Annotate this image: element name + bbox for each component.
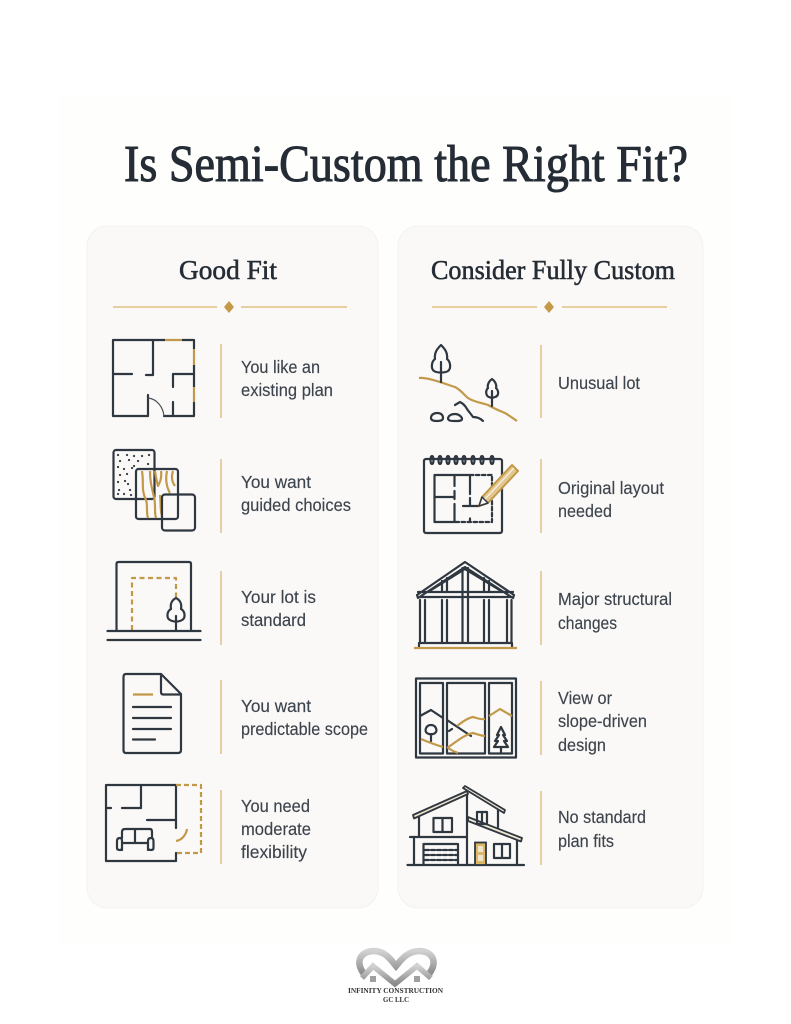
- heading: consider fully custom: Consider Fully Custom: [431, 255, 675, 285]
- text: original layout needed: needed: [558, 501, 612, 521]
- text: unusual lot: Unusual lot: [558, 373, 640, 393]
- text: you like an existing plan: existing plan: [241, 380, 333, 400]
- logo: [348, 951, 444, 1004]
- text: you want guided choices: [241, 472, 351, 515]
- icon: notebook layout: [424, 456, 518, 533]
- text: original layout needed: Original layout: [558, 478, 664, 498]
- text: you want predictable scope: [241, 696, 368, 739]
- icon: view window: [416, 678, 516, 758]
- icon: flexible floor plan: [106, 785, 201, 861]
- text: you need moderate flexibility: moderate: [241, 819, 311, 839]
- divider: [540, 571, 542, 645]
- text: you want guided choices: You want: [241, 472, 311, 492]
- divider: [220, 790, 222, 864]
- text: no standard plan fits: plan fits: [558, 831, 614, 851]
- heading: good fit: Good Fit: [179, 255, 277, 285]
- text: you need moderate flexibility: You need: [241, 796, 310, 816]
- divider: good fit: [113, 301, 347, 313]
- icon: material swatches: [114, 450, 195, 530]
- divider: [220, 680, 222, 754]
- text: your lot is standard: [241, 587, 316, 630]
- divider: [540, 459, 542, 533]
- text: major structural changes: changes: [558, 613, 617, 633]
- icon: sloped lot: [419, 345, 517, 421]
- logo subtext: GC LLC: [383, 995, 409, 1004]
- text: major structural changes: [558, 589, 672, 633]
- text: original layout needed: [558, 478, 664, 521]
- text: no standard plan fits: [558, 807, 646, 851]
- text: major structural changes: Major structural: [558, 589, 672, 609]
- text: view or slope-driven design: slope-driven: [558, 711, 647, 731]
- divider: [540, 791, 542, 865]
- icon: document: [124, 674, 181, 753]
- divider: [220, 459, 222, 533]
- divider: [540, 681, 542, 755]
- text: view or slope-driven design: [558, 688, 647, 755]
- text: view or slope-driven design: View or: [558, 688, 612, 708]
- divider: [220, 344, 222, 418]
- panel: good fit: [87, 226, 378, 908]
- panel: consider fully custom: [398, 226, 703, 908]
- text: you want predictable scope: You want: [241, 696, 311, 716]
- text: you want predictable scope: predictable scope: [241, 719, 368, 739]
- text: you need moderate flexibility: [241, 796, 311, 862]
- title: Is Semi-Custom the Right Fit?: [124, 136, 688, 193]
- icon: standard lot: [108, 562, 200, 640]
- text: your lot is standard: Your lot is: [241, 587, 316, 607]
- text: your lot is standard: standard: [241, 610, 306, 630]
- logo mark: [359, 951, 434, 984]
- text: you want guided choices: guided choices: [241, 495, 351, 515]
- icon: house: [408, 786, 524, 865]
- text: you like an existing plan: [241, 357, 333, 400]
- divider: consider fully custom: [432, 301, 667, 313]
- text: you need moderate flexibility: flexibility: [241, 842, 307, 862]
- text: view or slope-driven design: design: [558, 735, 606, 755]
- text: you like an existing plan: You like an: [241, 357, 320, 377]
- logo text: INFINITY CONSTRUCTION: [348, 986, 444, 995]
- divider: [220, 571, 222, 645]
- icon: floor plan: [113, 340, 194, 416]
- icon: house framing: [414, 562, 517, 648]
- divider: [540, 345, 542, 418]
- text: no standard plan fits: No standard: [558, 807, 646, 827]
